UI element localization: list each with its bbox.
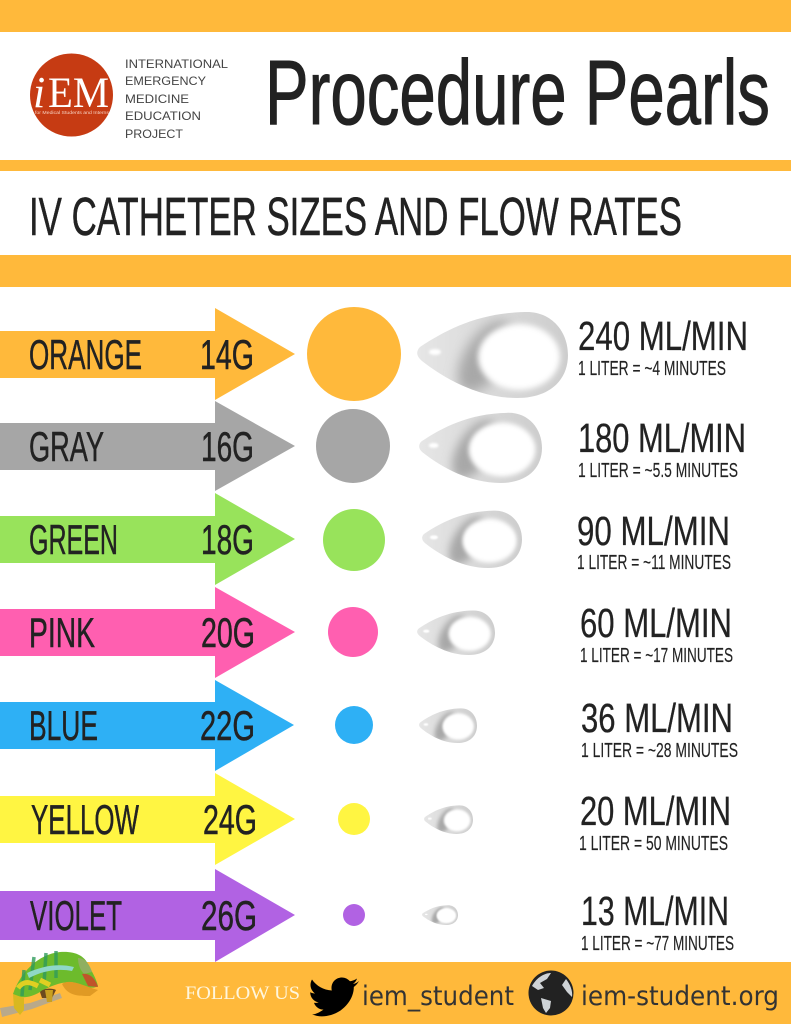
flow rate: 60 ml/min [580, 600, 733, 667]
header band: top [0, 0, 791, 32]
arrow: violet [0, 869, 295, 962]
arrow: green [0, 493, 295, 585]
gauge circle: gray [316, 409, 390, 483]
arrow: violet: VIOLET [30, 892, 122, 939]
arrow: pink [0, 587, 295, 678]
arrow: yellow: YELLOW [31, 796, 139, 843]
flow rate: 90 ml/min [577, 508, 731, 574]
organisation name: EMERGENCY [125, 74, 206, 88]
iEM logo [30, 54, 113, 136]
iEM logo: i [33, 68, 45, 117]
drop: 180 ml/min [419, 412, 542, 486]
flow rate: 36 ml/min [581, 695, 738, 762]
flow rate: 13 ml/min [581, 888, 734, 955]
row: pink 20G [0, 587, 733, 678]
arrow: violet: 26G [201, 892, 257, 939]
flow rate: 36 ml/min: 36 ML/MIN [581, 695, 733, 741]
arrow: orange: 14G [200, 331, 254, 378]
icon: globe [528, 970, 574, 1016]
drop: 60 ml/min [417, 610, 495, 657]
arrow: yellow: 24G [203, 796, 257, 843]
flow rate: 240 ml/min [578, 313, 748, 380]
arrow: pink: 20G [201, 609, 255, 656]
arrow: gray [0, 401, 295, 491]
gauge circle: violet [343, 904, 365, 926]
gauge circle: yellow [338, 803, 370, 835]
row: green 18G [0, 493, 731, 585]
drop: 36 ml/min [419, 708, 477, 744]
arrow: yellow [0, 773, 295, 865]
gauge circle: pink [328, 607, 378, 657]
arrow: gray: 16G [201, 423, 254, 470]
follow us label: FOLLOW US [185, 983, 300, 1004]
gauge circle: orange [307, 307, 401, 401]
flow rate: 240 ml/min: 1 LITER = ~4 MINUTES [578, 358, 726, 380]
organisation name: PROJECT [125, 127, 184, 141]
twitter handle: iem_student [362, 981, 514, 1012]
gauge circle: blue [335, 706, 373, 744]
footer band [0, 962, 791, 1024]
flow rate: 20 ml/min: 20 ML/MIN [580, 788, 731, 834]
arrow: blue [0, 680, 294, 771]
arrow: blue: 22G [200, 702, 255, 749]
website: iem-student.org [581, 981, 779, 1012]
gauge circle: green [323, 509, 385, 571]
row: orange 14G [0, 307, 748, 402]
arrow: orange: ORANGE [29, 331, 142, 378]
arrow: pink: PINK [29, 609, 95, 656]
arrow: green: 18G [201, 516, 254, 563]
organisation name [125, 57, 228, 141]
icon: chameleon [0, 951, 98, 1017]
iEM logo: for Medical Students and Interns [35, 110, 110, 115]
organisation name: MEDICINE [125, 92, 189, 106]
flow rate: 180 ml/min [578, 415, 746, 482]
drop: 240 ml/min [417, 311, 568, 402]
iEM logo: EM [48, 70, 109, 117]
drop: 20 ml/min [424, 805, 473, 835]
organisation name: EDUCATION [125, 109, 201, 123]
flow rate: 20 ml/min: 1 LITER = 50 MINUTES [579, 833, 728, 855]
row: yellow 24G [0, 773, 731, 865]
header band: under subtitle [0, 255, 791, 287]
flow rate: 13 ml/min: 13 ML/MIN [581, 888, 729, 934]
arrow: orange [0, 308, 295, 400]
row: violet 26G [0, 869, 734, 962]
flow rate: 20 ml/min [579, 788, 731, 855]
arrow: green: GREEN [29, 516, 118, 563]
drop: 90 ml/min [422, 510, 522, 570]
icon: twitter bird [310, 978, 359, 1016]
flow rate: 90 ml/min: 90 ML/MIN [577, 508, 730, 554]
row: gray 16G [0, 401, 746, 491]
organisation name: INTERNATIONAL [125, 57, 228, 71]
arrow: gray: GRAY [29, 423, 104, 470]
header band: under title [0, 160, 791, 171]
arrow: blue: BLUE [29, 702, 98, 749]
drop: 13 ml/min [422, 905, 458, 926]
row: blue 22G [0, 680, 738, 771]
flow rate: 60 ml/min: 60 ML/MIN [580, 600, 732, 646]
